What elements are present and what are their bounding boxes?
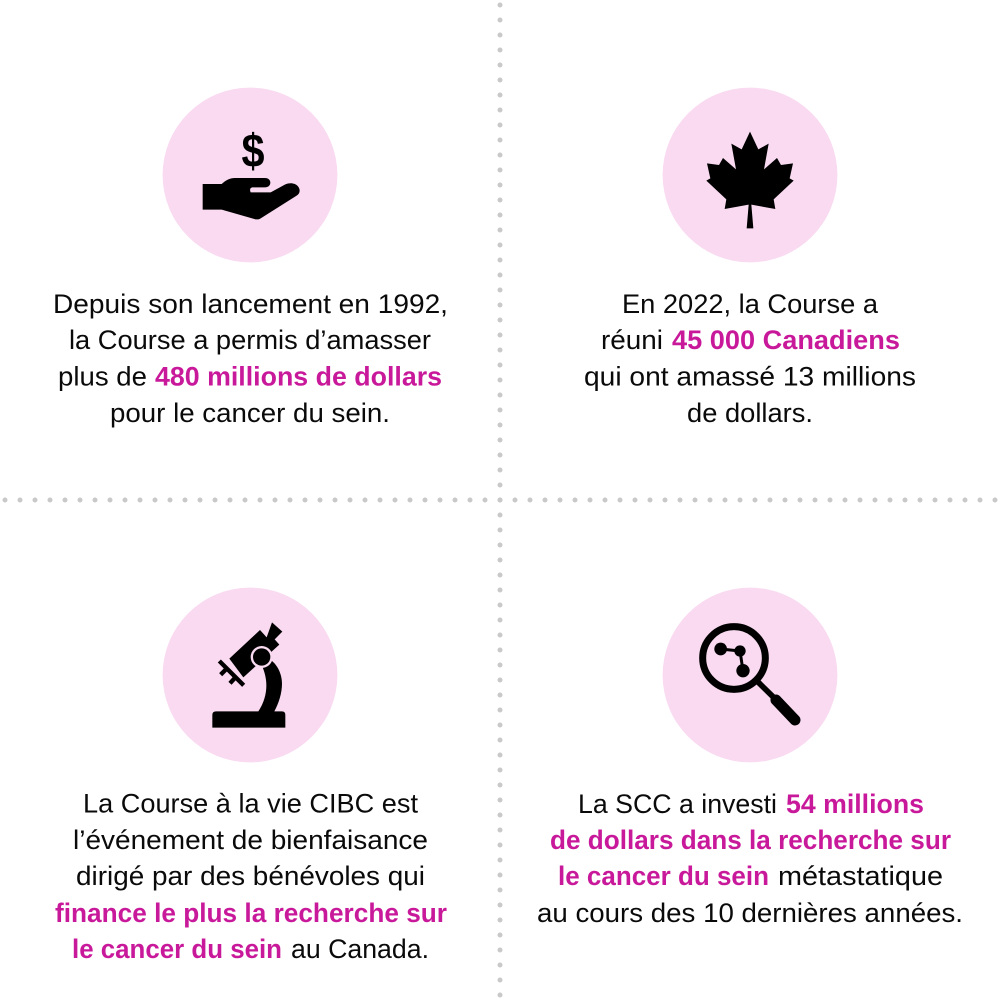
text: since 1992: la Course a permis d’amasser	[69, 325, 431, 355]
text: 2022	[584, 289, 916, 428]
text: metastatic research	[537, 789, 963, 928]
icon: hand holding a dollar: $	[242, 124, 264, 177]
text: since 1992	[53, 289, 448, 428]
text: 2022: qui ont amassé 13 millions	[584, 362, 916, 392]
text: metastatic research: au cours des 10 dernières années.	[537, 898, 963, 928]
text: metastatic research: le cancer du sein	[558, 861, 769, 891]
icon: hand holding a dollar	[163, 88, 337, 262]
text: volunteer-led event: finance le plus la recherche sur	[55, 898, 447, 928]
icon: microscope	[163, 588, 337, 762]
text: 2022: réuni	[601, 325, 663, 355]
text: volunteer-led event	[55, 788, 447, 964]
text: metastatic research: La SCC a investi	[578, 789, 777, 819]
text: metastatic research: 54 millions	[786, 789, 924, 819]
panel: funds raised since 1992	[53, 88, 448, 428]
text: volunteer-led event: au Canada.	[291, 934, 429, 964]
text: since 1992: 480 millions de dollars	[155, 362, 442, 392]
panel: 2022 participation	[584, 88, 916, 428]
icon: maple leaf	[663, 88, 837, 262]
icon: magnifying glass	[663, 588, 837, 762]
text: 2022: 45 000 Canadiens	[672, 325, 900, 355]
panel: volunteer-led event	[55, 588, 447, 964]
text: since 1992: plus de	[58, 362, 147, 392]
text: since 1992: Depuis son lancement en 1992,	[53, 289, 448, 319]
text: 2022: de dollars.	[687, 398, 813, 428]
text: volunteer-led event: le cancer du sein	[72, 934, 282, 964]
text: since 1992: pour le cancer du sein.	[110, 398, 390, 428]
text: 2022: En 2022, la Course a	[622, 289, 879, 319]
text: volunteer-led event: La Course à la vie CIBC est	[83, 788, 418, 818]
text: metastatic research: de dollars dans la recherche sur	[550, 825, 951, 855]
text: metastatic research: métastatique	[778, 861, 943, 891]
text: volunteer-led event: dirigé par des bénévoles qui	[76, 861, 425, 891]
panel: metastatic research	[537, 588, 963, 928]
text: volunteer-led event: l’événement de bienfaisance	[73, 825, 428, 855]
